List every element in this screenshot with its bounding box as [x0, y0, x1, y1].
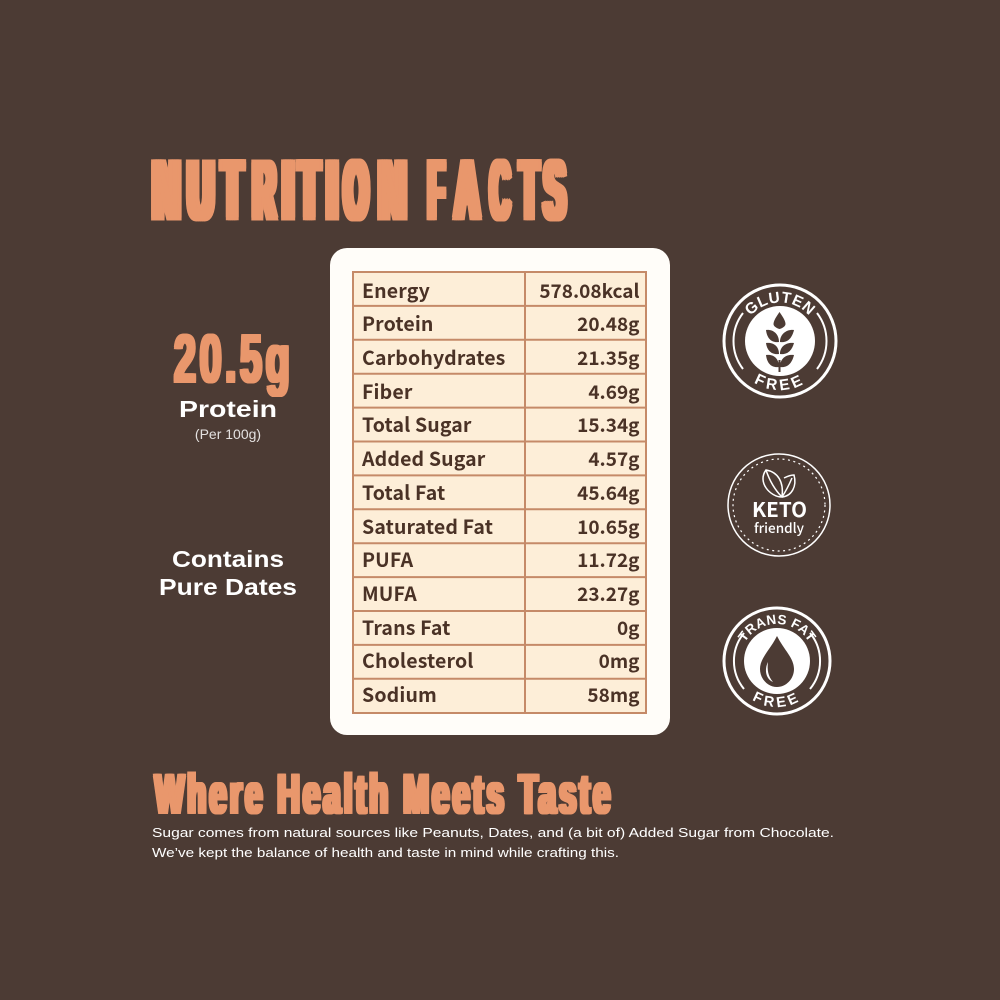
icon: gluten free badge	[722, 284, 838, 398]
title: T	[222, 142, 242, 236]
row values: 23.27g	[577, 580, 640, 607]
contains pure dates label	[159, 546, 297, 600]
row labels	[361, 275, 505, 708]
row labels: Trans Fat	[362, 612, 451, 641]
icon: keto friendly badge	[728, 454, 830, 556]
row values: 58mg	[587, 681, 640, 708]
row values: 4.57g	[588, 445, 640, 472]
icon: gluten free badge: GLUTEN	[746, 292, 816, 315]
protein amount: 20.5g	[174, 320, 293, 396]
row labels: Fiber	[362, 376, 413, 405]
title: I	[283, 142, 293, 236]
row labels: Cholesterol	[362, 645, 474, 674]
title: N	[379, 142, 406, 236]
protein label: (Per 100g)	[195, 426, 261, 442]
row labels: Total Sugar	[362, 409, 472, 438]
protein label: Protein	[179, 396, 277, 422]
title	[151, 142, 568, 236]
icon: gluten free badge: FREE	[754, 374, 803, 390]
row labels: Saturated Fat	[362, 511, 493, 540]
row values: 15.34g	[577, 411, 640, 438]
title: S	[544, 142, 565, 236]
icon: keto friendly badge: KETO	[752, 494, 807, 523]
panel: nutrition table	[330, 248, 670, 735]
title: C	[490, 142, 510, 236]
row values: 21.35g	[577, 344, 640, 371]
icon: trans fat free badge: TRANS FAT	[737, 614, 816, 640]
title: I	[327, 142, 337, 236]
icon: wheat	[766, 312, 794, 372]
row labels: Sodium	[362, 679, 437, 708]
contains pure dates label: Pure Dates	[159, 574, 297, 600]
title: U	[188, 142, 214, 236]
protein label	[179, 396, 277, 442]
icon: trans fat free badge: FREE	[752, 691, 798, 708]
row values: 4.69g	[588, 378, 640, 405]
row values: 578.08kcal	[539, 277, 640, 304]
row values	[539, 277, 640, 708]
row values: 10.65g	[577, 513, 640, 540]
row values: 11.72g	[577, 546, 640, 573]
icon: leaves	[763, 470, 795, 497]
row values: 0g	[617, 614, 640, 641]
title: T	[520, 142, 538, 236]
row labels: Energy	[362, 275, 430, 304]
row labels: Total Fat	[362, 477, 445, 506]
icon: keto friendly badge: friendly	[754, 517, 805, 537]
body text: We’ve kept the balance of health and taste in mind while crafting this.	[152, 845, 619, 860]
heading: where health meets taste: Where Health Meets Taste	[155, 762, 614, 825]
body text: Sugar comes from natural sources like Peanuts, Dates, and (a bit of) Added Sugar from Chocolate.	[152, 825, 834, 840]
row labels: Added Sugar	[361, 443, 486, 472]
title: F	[428, 142, 444, 236]
icon: trans fat free badge	[722, 606, 832, 716]
row labels: Carbohydrates	[362, 342, 505, 371]
row labels: MUFA	[362, 578, 417, 607]
icon: oil drop	[760, 636, 794, 687]
title: N	[152, 142, 179, 236]
title: A	[455, 142, 479, 236]
title: T	[299, 142, 320, 236]
title: O	[344, 142, 368, 236]
body text	[152, 825, 834, 860]
contains pure dates label: Contains	[172, 546, 284, 572]
row values: 0mg	[599, 647, 640, 674]
title: R	[253, 142, 276, 236]
row values: 20.48g	[577, 310, 640, 337]
row labels: Protein	[362, 308, 434, 337]
row labels: PUFA	[362, 544, 414, 573]
row values: 45.64g	[577, 479, 640, 506]
